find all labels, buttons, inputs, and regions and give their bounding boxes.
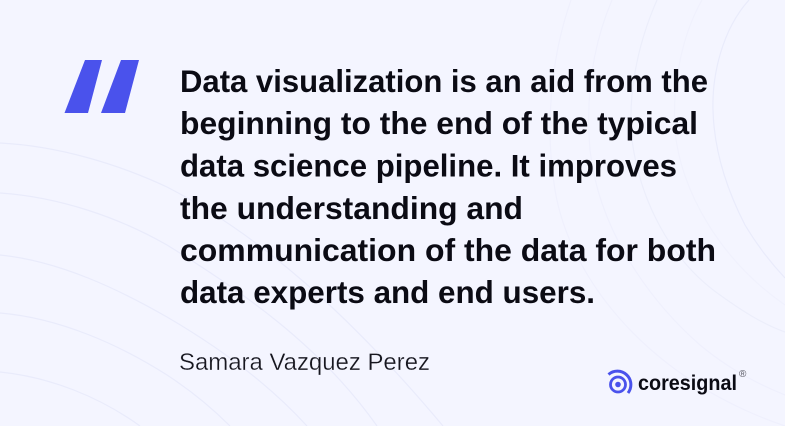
quote text bbox=[180, 63, 716, 310]
quote text: data science pipeline. It improves bbox=[180, 148, 677, 184]
quote text: beginning to the end of the typical bbox=[180, 105, 698, 141]
registered mark: ® bbox=[739, 369, 747, 380]
quote text: data experts and end users. bbox=[180, 274, 595, 310]
quote text: communication of the data for both bbox=[180, 232, 716, 268]
icon: coresignal mark bbox=[608, 371, 631, 393]
wordmark: coresignal bbox=[638, 371, 737, 395]
icon: quotation mark bbox=[64, 60, 139, 113]
author name: Samara Vazquez Perez bbox=[179, 349, 430, 376]
quote text: Data visualization is an aid from the bbox=[180, 63, 708, 99]
logo: coresignal bbox=[608, 369, 747, 395]
quote text: the understanding and bbox=[180, 190, 523, 226]
